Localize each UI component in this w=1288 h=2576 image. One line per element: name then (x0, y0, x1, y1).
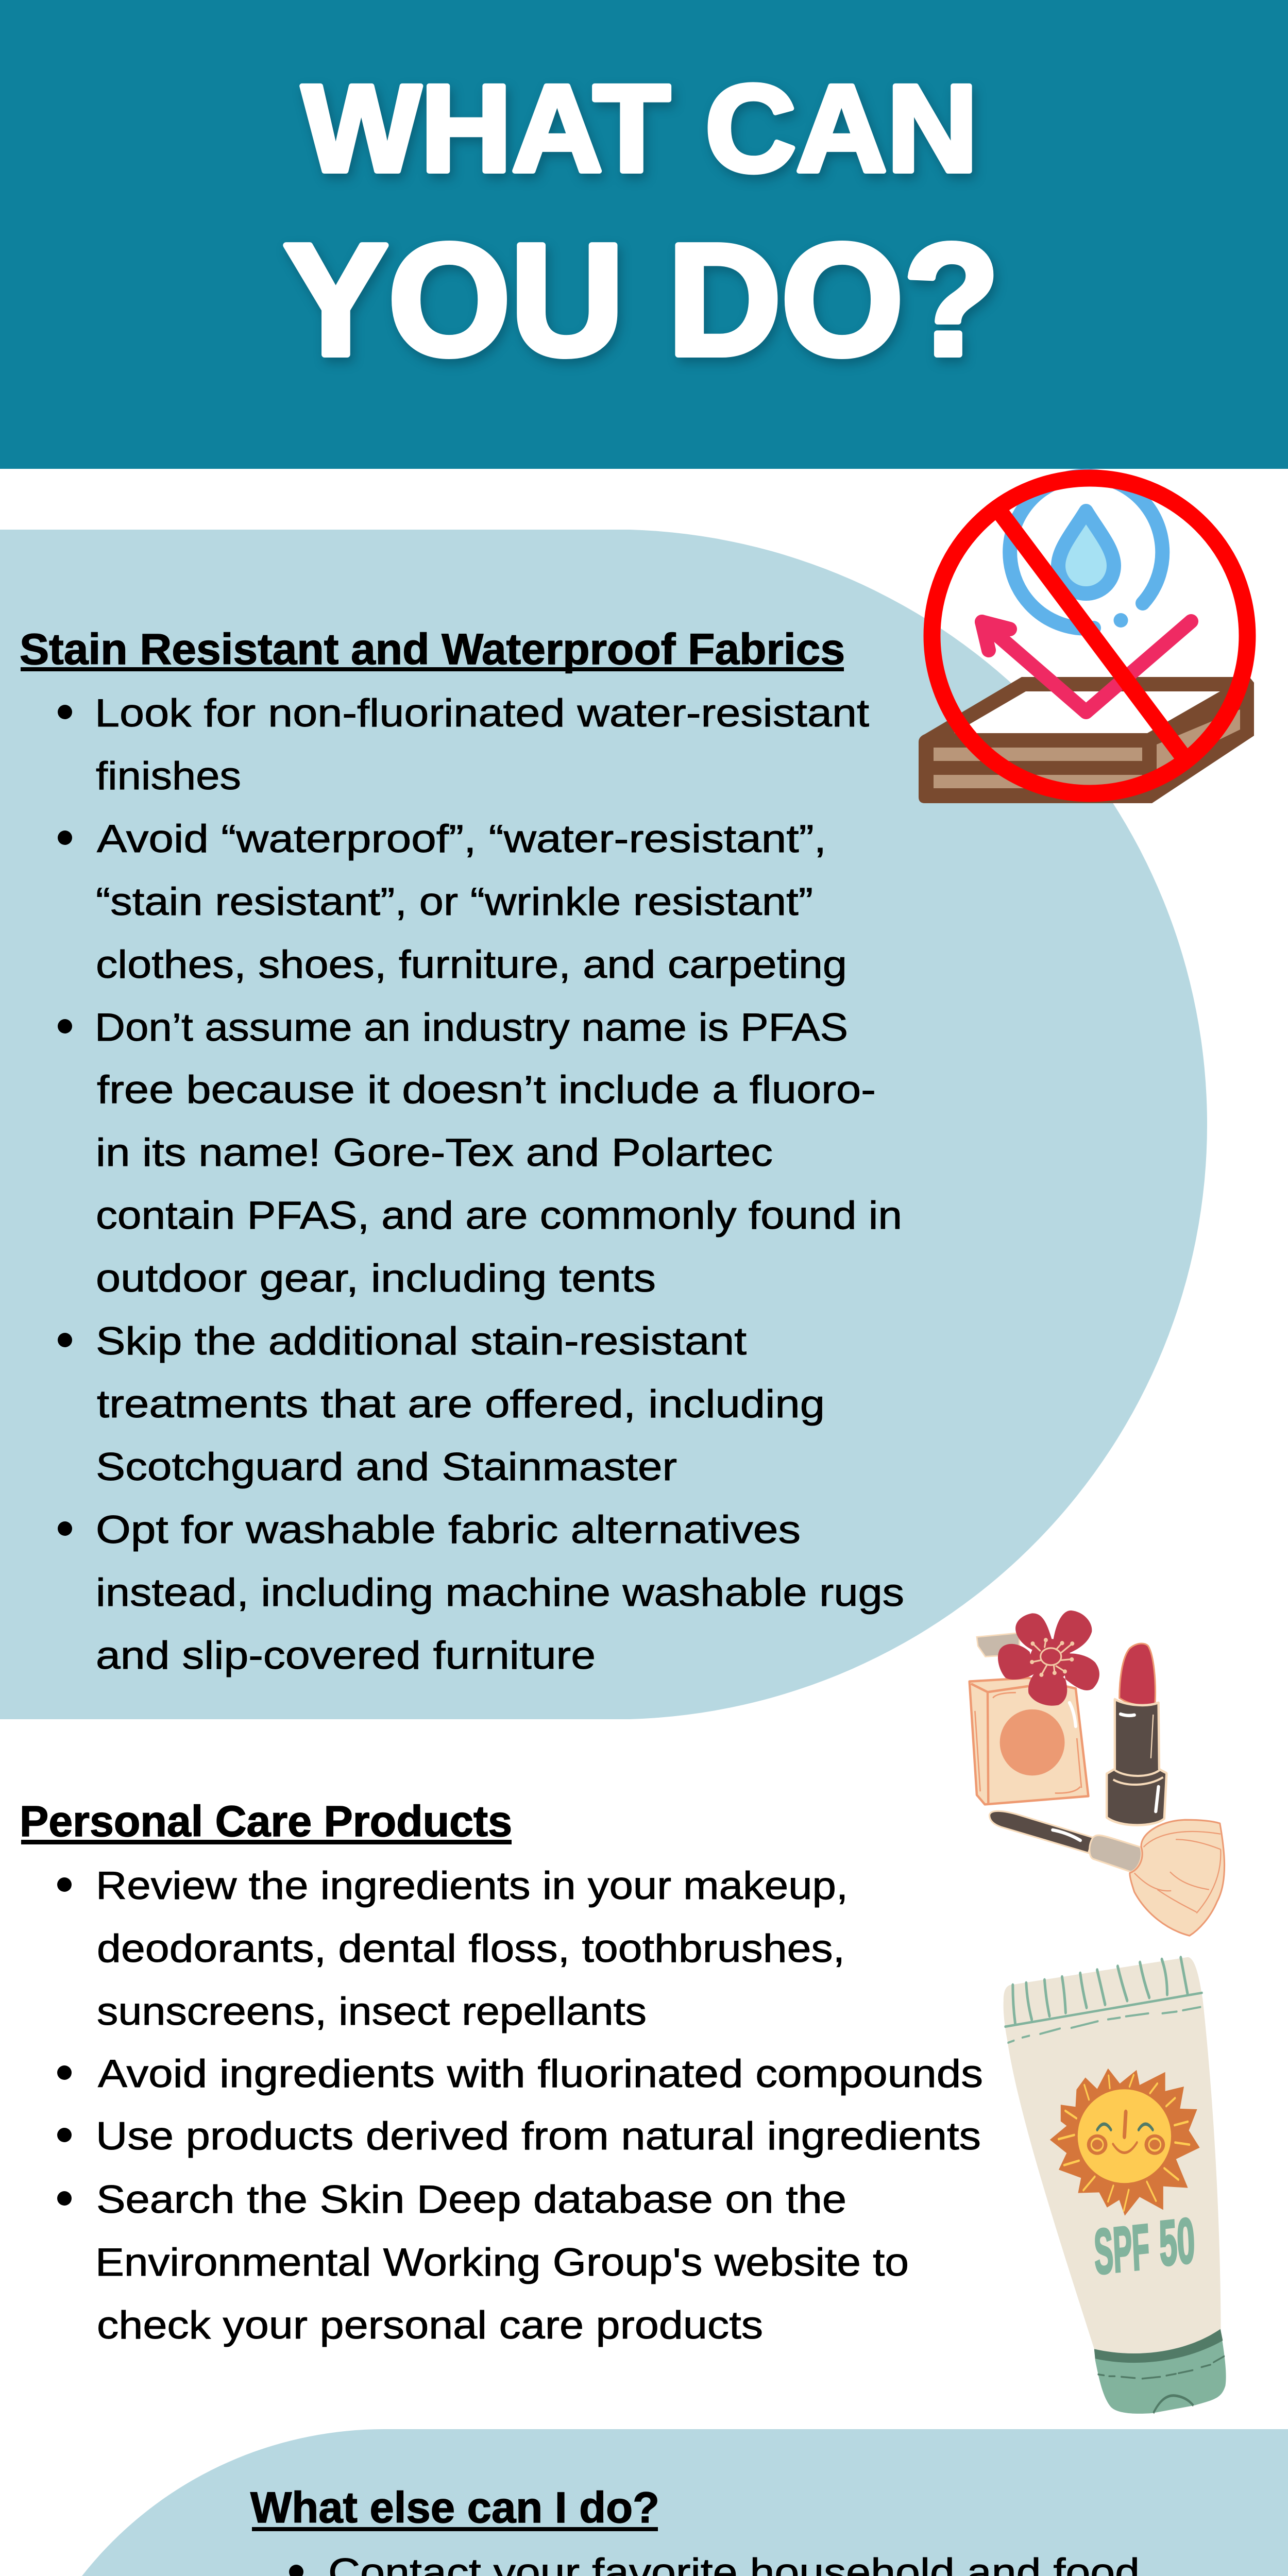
bullet list: fabrics: outdoor gear, including tents (96, 1257, 656, 1300)
bullet list: fabrics: clothes, shoes, furniture, and carpeting (96, 943, 847, 987)
icon: sunscreen tube (1004, 1957, 1226, 2414)
bullet list: personal care: Search the Skin Deep database on the (96, 2178, 846, 2222)
bullet list: fabrics: Scotchguard and Stainmaster (96, 1445, 677, 1489)
bullet list: fabrics: contain PFAS, and are commonly found in (96, 1194, 902, 1238)
bullet list: fabrics: Avoid “waterproof”, “water-resistant”, (97, 817, 826, 861)
bullet list: fabrics: instead, including machine washable rugs (96, 1571, 904, 1615)
bullet list: fabrics (58, 691, 904, 1677)
lipstick (1107, 1643, 1166, 1825)
bullet list: fabrics: Look for non-fluorinated water-resistant (95, 691, 869, 735)
water drop and ring (1010, 476, 1162, 629)
bullet list: fabrics: Opt for washable fabric alternatives (96, 1508, 801, 1552)
heading: personal care: Personal Care Products (20, 1797, 512, 1845)
tube cap (1094, 2329, 1226, 2414)
fabric box (919, 677, 1254, 803)
bullet list: personal care: deodorants, dental floss, toothbrushes, (97, 1927, 845, 1971)
bullet list: personal care: sunscreens, insect repellants (97, 1990, 647, 2033)
pink arrow (982, 621, 1191, 712)
tube body (1004, 1957, 1221, 2353)
title: WHAT CAN (302, 59, 978, 197)
flower (998, 1611, 1099, 1706)
bullet list: fabrics: and slip-covered furniture (96, 1634, 596, 1677)
header banner (0, 0, 1288, 469)
bullet list: personal care: Use products derived from natural ingredients (96, 2114, 981, 2158)
icon: makeup (970, 1611, 1225, 1936)
bullet list: personal care: check your personal care products (97, 2303, 763, 2347)
bullet list: fabrics: in its name! Gore-Tex and Polartec (96, 1131, 773, 1175)
sun (1050, 2069, 1200, 2216)
title: YOU DO? (283, 211, 999, 388)
panel: stain resistant and waterproof fabrics (0, 530, 1207, 1719)
bullet list: fabrics: treatments that are offered, including (97, 1382, 825, 1426)
bullet list: fabrics: finishes (96, 754, 241, 798)
bullet list: personal care: Review the ingredients in your makeup, (96, 1864, 848, 1908)
bullet list: personal care (57, 1864, 983, 2347)
bullet list: fabrics: free because it doesn’t include a fluoro- (97, 1068, 876, 1112)
bullet list: personal care: Avoid ingredients with fluorinated compounds (98, 2052, 983, 2096)
perfume palette (970, 1633, 1088, 1804)
bullet list: fabrics: Skip the additional stain-resistant (96, 1319, 747, 1363)
crimped stripes (1005, 1958, 1202, 2043)
heading and list: personal care products (20, 1797, 983, 2347)
heading: what else: What else can I do? (250, 2483, 659, 2532)
heading: fabrics: Stain Resistant and Waterproof Fabrics (20, 625, 845, 673)
SPF 50 label: 50 (1158, 2205, 1196, 2280)
bullet list: personal care: Environmental Working Group's website to (95, 2241, 909, 2284)
prohibition sign (932, 478, 1247, 793)
icon: no waterproof fabric (919, 476, 1254, 803)
SPF 50 label: SPF (1093, 2211, 1151, 2288)
makeup brush (990, 1811, 1225, 1936)
panel: what else can I do (0, 2429, 1288, 2576)
bullet list: fabrics: “stain resistant”, or “wrinkle resistant” (96, 880, 813, 924)
title (283, 59, 999, 388)
bullet list: fabrics: Don’t assume an industry name is PFAS (95, 1006, 848, 1049)
